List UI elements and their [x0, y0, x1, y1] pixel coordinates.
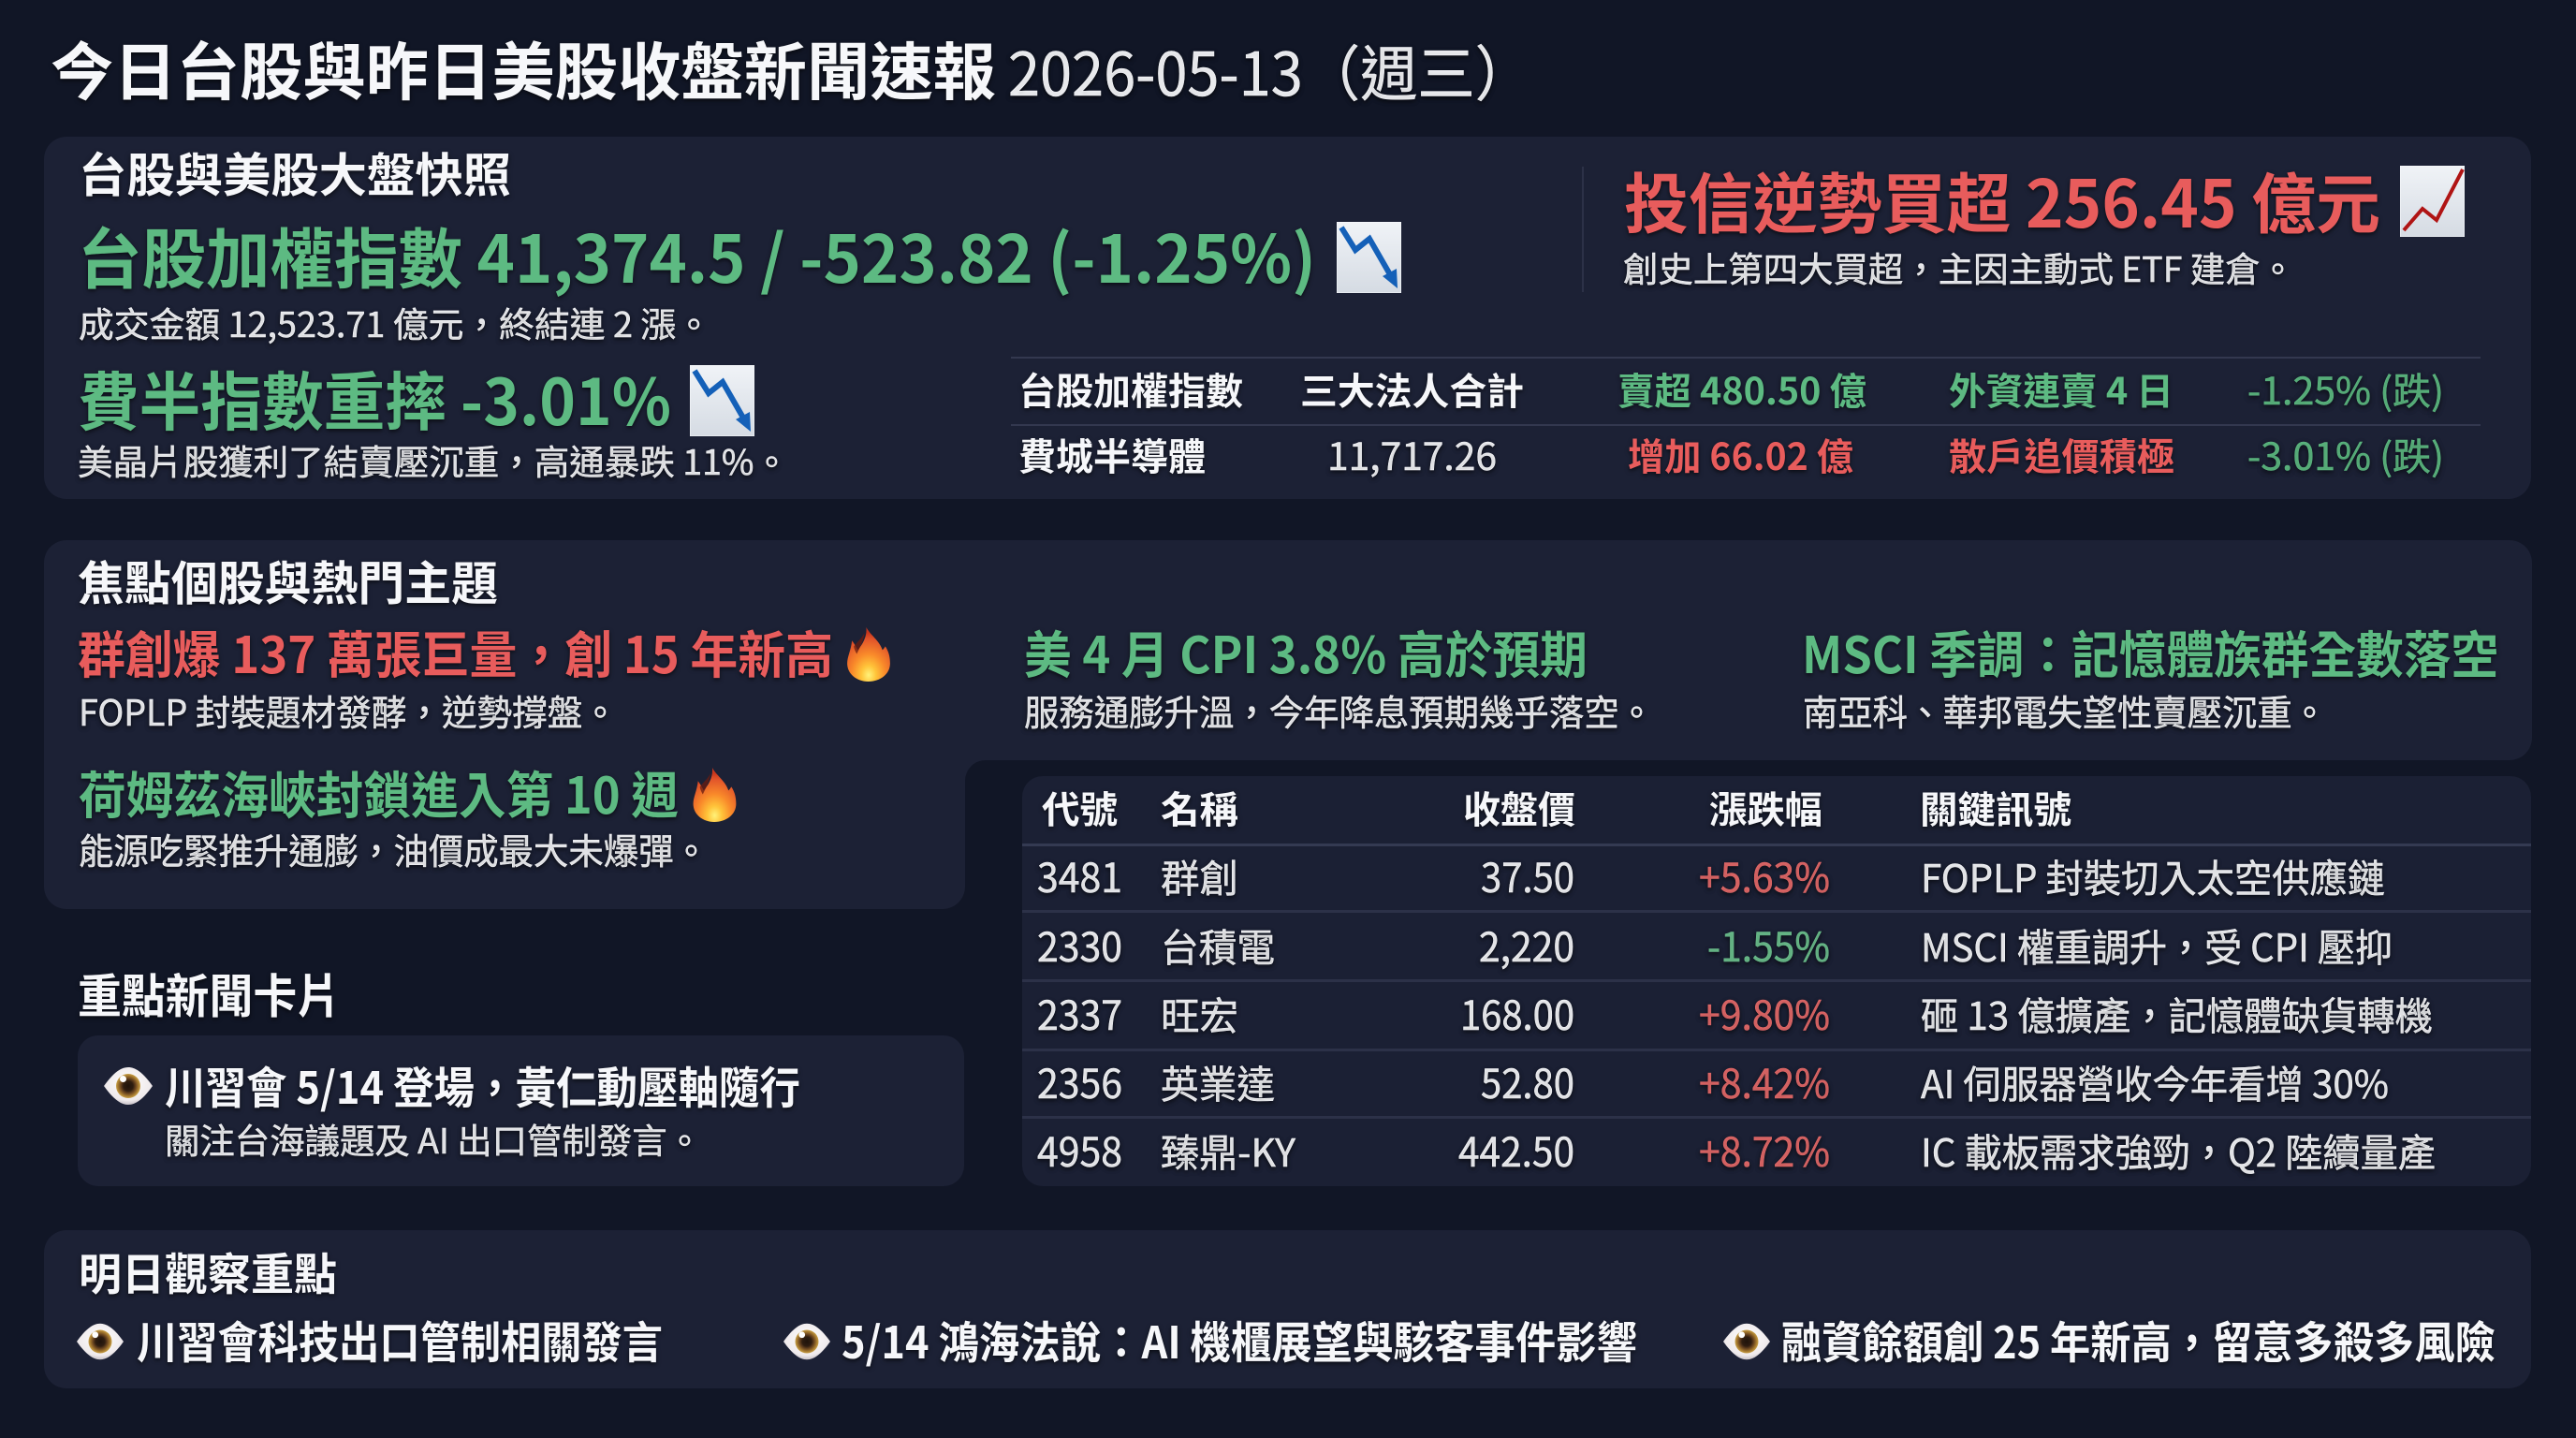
SOX note: 美晶片股獲利了結賣壓沉重，高通暴跌 11%。 [78, 434, 789, 485]
story: Strait of Hormuz: 能源吃緊推升通膨，油價成最大未爆彈。 [79, 823, 709, 874]
row: 4958: IC 載板需求強勁，Q2 陸續量產 [1921, 1122, 2436, 1178]
row: 2356: 52.80 [1481, 1052, 1574, 1110]
market summary table: 三大法人合計 [1300, 361, 1524, 416]
story: Strait of Hormuz [79, 755, 736, 874]
heading: tomorrow watchlist: 明日觀察重點 [79, 1239, 337, 1303]
row: 2330 [1037, 916, 2393, 974]
row: 2337: 砸 13 億擴產，記憶體缺貨轉機 [1921, 985, 2433, 1041]
row: 2356: 2356 [1037, 1052, 1122, 1110]
title: 今日台股與昨日美股收盤新聞速報 [51, 22, 996, 113]
row: 3481: 37.50 [1481, 846, 1574, 904]
watch item 1: 川習會科技出口管制相關發言 [137, 1307, 663, 1372]
table: focus stocks [1022, 776, 2531, 1186]
row: 3481: 3481 [1037, 846, 1122, 904]
icon: chart falling [1337, 222, 1401, 293]
icon: eye [104, 1067, 153, 1105]
TAIEX headline: 台股加權指數 41,374.5 / -523.82 (-1.25%) [78, 208, 1316, 302]
watch item 3: 融資餘額創 25 年新高，留意多殺多風險 [1781, 1307, 2496, 1372]
market summary table: 外資連賣 4 日 [1949, 361, 2174, 416]
investment trust note: 創史上第四大買超，主因主動式 ETF 建倉。 [1623, 242, 2295, 292]
panel: market snapshot [44, 137, 2531, 499]
story: Innolux: FOPLP 封裝題材發酵，逆勢撐盤。 [79, 684, 618, 736]
heading: focus stocks: 焦點個股與熱門主題 [78, 547, 498, 614]
row: 2330: MSCI 權重調升，受 CPI 壓抑 [1921, 917, 2393, 973]
news note: 關注台海議題及 AI 出口管制發言。 [165, 1113, 702, 1164]
story: US CPI [1024, 614, 1654, 736]
row: 2330: 2330 [1037, 916, 1122, 974]
story: MSCI: MSCI 季調：記憶體族群全數落空 [1802, 614, 2498, 688]
title: 2026-05-13（週三） [1008, 27, 1532, 113]
heading: key news cards: 重點新聞卡片 [78, 960, 341, 1027]
row: 3481: +5.63% [1699, 846, 1830, 904]
row: 2330: 2,220 [1479, 916, 1574, 974]
market summary table: 費城半導體 [1018, 427, 1206, 481]
story: MSCI: 南亞科、華邦電失望性賣壓沉重。 [1803, 684, 2327, 736]
row: 3481: FOPLP 封裝切入太空供應鏈 [1921, 847, 2385, 903]
market summary table: 台股加權指數 [1018, 361, 1243, 416]
table header [1042, 780, 2071, 834]
story: US CPI: 服務通膨升溫，今年降息預期幾乎落空。 [1024, 684, 1654, 736]
watch item 2: 5/14 鴻海法說：AI 機櫃展望與駭客事件影響 [842, 1307, 1637, 1372]
row: 2337 [1037, 984, 2433, 1042]
investment trust headline: 投信逆勢買超 256.45 億元 [1624, 153, 2380, 247]
row: 2356: AI 伺服器營收今年看增 30% [1921, 1053, 2389, 1109]
row: 3481 [1037, 846, 2385, 904]
row: 2337: 旺宏 [1161, 985, 1238, 1041]
market summary table: 賣超 480.50 億 [1617, 361, 1866, 416]
row: 4958 [1037, 1121, 2436, 1179]
row: 2330: -1.55% [1707, 916, 1830, 974]
market summary table: -1.25% (跌) [2247, 361, 2444, 416]
icon: chart falling [690, 365, 754, 436]
TAIEX note: 成交金額 12,523.71 億元，終結連 2 漲。 [79, 297, 711, 347]
row: 3481: 群創 [1161, 847, 1238, 903]
row: 4958: 442.50 [1458, 1121, 1574, 1179]
news headline: 川習會 5/14 登場，黃仁動壓軸隨行 [165, 1052, 800, 1117]
row: 2356 [1037, 1052, 2389, 1110]
row: 2337: +9.80% [1699, 984, 1830, 1042]
table header: 收盤價 [1463, 780, 1575, 834]
market summary table: 散戶追價積極 [1949, 427, 2174, 481]
heading: market snapshot: 台股與美股大盤快照 [79, 139, 511, 206]
market summary table: -3.01% (跌) [2247, 427, 2444, 481]
card: key news [78, 1035, 964, 1186]
row: 4958: 4958 [1037, 1121, 1122, 1179]
divider [1582, 167, 1584, 292]
story: Innolux [78, 614, 890, 736]
story: Strait of Hormuz: 荷姆茲海峽封鎖進入第 10 週 [79, 755, 679, 829]
row: 2337: 168.00 [1460, 984, 1574, 1042]
panel: focus stocks and themes [44, 540, 2532, 909]
table header: 關鍵訊號 [1920, 780, 2071, 834]
row: 2356: 英業達 [1161, 1053, 1275, 1109]
market summary table: 增加 66.02 億 [1628, 427, 1853, 481]
story: US CPI: 美 4 月 CPI 3.8% 高於預期 [1024, 614, 1588, 688]
row: 2337: 2337 [1037, 984, 1122, 1042]
story: MSCI [1802, 614, 2498, 736]
icon: chart rising [2400, 166, 2465, 237]
table header: 代號 [1042, 780, 1118, 834]
row: 4958: 臻鼎-KY [1161, 1122, 1295, 1178]
table header: 名稱 [1161, 780, 1238, 834]
market summary table [1011, 357, 2481, 481]
table header: 漲跌幅 [1709, 780, 1822, 834]
title [51, 22, 1532, 113]
panel: tomorrow watchlist [44, 1230, 2531, 1388]
row: 2356: +8.42% [1699, 1052, 1830, 1110]
SOX headline: 費半指數重摔 -3.01% [78, 351, 671, 444]
row: 4958: +8.72% [1699, 1121, 1830, 1179]
row: 2330: 台積電 [1161, 917, 1275, 973]
market summary table: 11,717.26 [1327, 427, 1497, 481]
story: Innolux: 群創爆 137 萬張巨量，創 15 年新高 [78, 614, 833, 688]
